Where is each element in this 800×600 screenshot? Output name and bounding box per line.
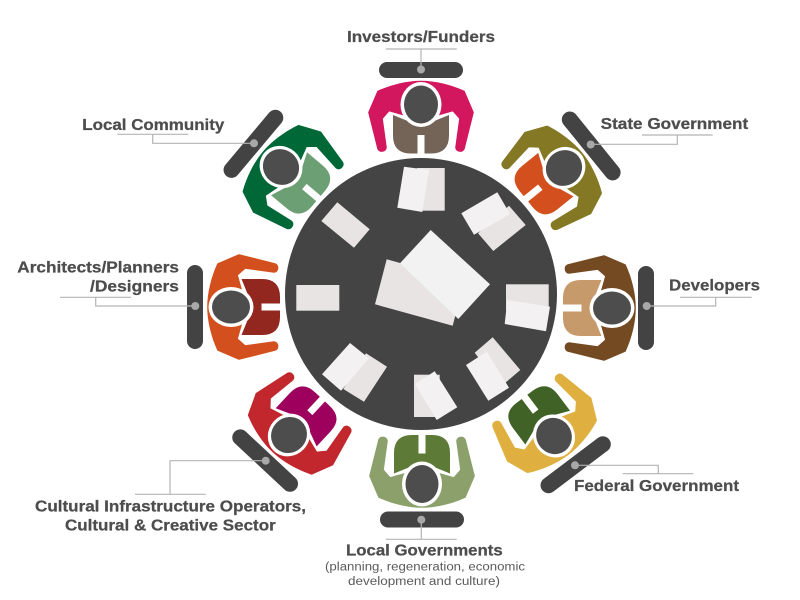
- desk bar: [380, 512, 464, 528]
- person: developers: [563, 256, 654, 360]
- body: [508, 153, 573, 221]
- desk bar: [559, 108, 624, 184]
- desk bar: [638, 266, 654, 350]
- body: [563, 280, 602, 336]
- label: cultural infrastructure operators: [35, 499, 306, 535]
- body: [242, 279, 280, 335]
- leader: local community: [117, 134, 258, 147]
- body: [276, 380, 343, 446]
- leader: local governments: [386, 516, 457, 539]
- head: [251, 137, 311, 197]
- leader: developers: [643, 297, 752, 310]
- label: local governments: development and culture): [348, 576, 500, 588]
- label: investors/funders: Investors/Funders: [347, 29, 495, 46]
- body: [394, 435, 450, 474]
- desk bar: [379, 62, 463, 78]
- head: [524, 406, 584, 466]
- leader: investors: [386, 49, 457, 74]
- arms: [370, 437, 474, 507]
- body: [393, 115, 449, 154]
- body: [271, 152, 337, 220]
- leader: cultural sector: [135, 457, 270, 494]
- head: [534, 138, 594, 198]
- arms: [495, 113, 615, 238]
- person: architects/planners/designers: [187, 255, 280, 359]
- head: [590, 288, 634, 328]
- leader: architects: [60, 297, 199, 310]
- arms: [565, 256, 635, 360]
- arms: [369, 82, 473, 151]
- label: local governments: Local Governments: [346, 543, 503, 560]
- label: cultural infrastructure operators: Cultural & Creative Sector: [65, 518, 276, 535]
- label: state government: State Government: [601, 116, 748, 133]
- papers: cultural sector: [322, 343, 387, 402]
- arms: [235, 366, 359, 487]
- desk bar: [220, 107, 287, 181]
- body: [502, 380, 570, 444]
- label: architects/planners/designers: Architects/Planners: [17, 259, 179, 276]
- person: federal government: [483, 366, 622, 502]
- papers: local governments: [414, 371, 457, 420]
- head: [402, 462, 442, 506]
- head: [259, 405, 319, 465]
- label: architects/planners/designers: [17, 259, 179, 296]
- person: state government: [493, 101, 630, 239]
- person: local governments: [370, 435, 474, 528]
- papers: developers: [505, 284, 550, 331]
- arms: [208, 255, 278, 359]
- papers: state government: [461, 192, 526, 251]
- label: local governments: [325, 543, 525, 588]
- person: local community: [214, 99, 352, 238]
- person: cultural infrastructure operators: [222, 364, 360, 502]
- label: architects/planners/designers: /Designers: [90, 279, 179, 296]
- label: developers: Developers: [669, 278, 760, 295]
- papers: investors: [397, 167, 445, 212]
- papers: federal government: [466, 337, 520, 401]
- central papers: [375, 230, 490, 326]
- leader: state government: [587, 135, 713, 148]
- person: investors/funders: [369, 62, 473, 154]
- head: [208, 287, 254, 327]
- arms: [230, 112, 350, 237]
- label: local community: Local Community: [82, 117, 225, 134]
- desk bar: [537, 433, 614, 496]
- label: federal government: Federal Government: [574, 478, 739, 495]
- label: cultural infrastructure operators: Cultural Infrastructure Operators,: [35, 499, 306, 516]
- desk bar: [229, 426, 301, 495]
- paper: architects: [296, 285, 339, 311]
- label: local governments: (planning, regeneration, economic: [325, 562, 525, 574]
- paper: local community: [321, 202, 370, 248]
- papers on table: [296, 167, 550, 420]
- arms: [484, 368, 609, 486]
- round table: [285, 158, 557, 430]
- desk bar: [187, 265, 203, 349]
- head: [400, 82, 442, 127]
- leader: federal government: [571, 461, 693, 474]
